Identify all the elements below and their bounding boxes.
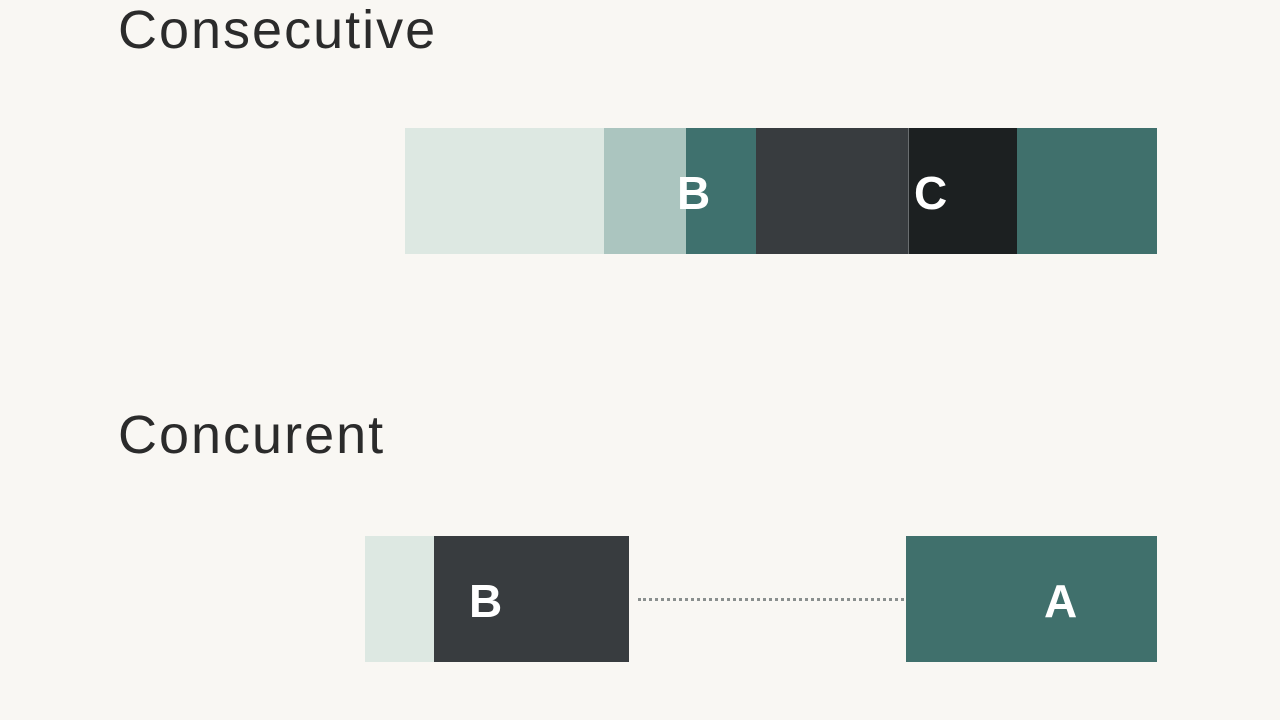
segment: teal end — [1017, 128, 1157, 254]
bar: concurrent B — [365, 536, 629, 662]
bar: consecutive sequence — [405, 128, 1157, 254]
segment: dark — [756, 128, 908, 254]
title: Consecutive: Consecutive — [118, 0, 437, 60]
segment: dark B — [434, 536, 629, 662]
segment: light — [365, 536, 434, 662]
segment: black C — [908, 128, 1018, 254]
segment: mid grey-green — [604, 128, 688, 254]
segment: light — [405, 128, 604, 254]
label: B: B — [469, 575, 502, 627]
bar: concurrent A — [906, 536, 1157, 662]
dotted connector — [638, 598, 904, 601]
label: C: C — [914, 167, 947, 219]
label: A: A — [1044, 575, 1077, 627]
label: B: B — [677, 167, 710, 219]
title: Concurent: Concurent — [118, 405, 385, 465]
segment: teal B — [686, 128, 756, 254]
